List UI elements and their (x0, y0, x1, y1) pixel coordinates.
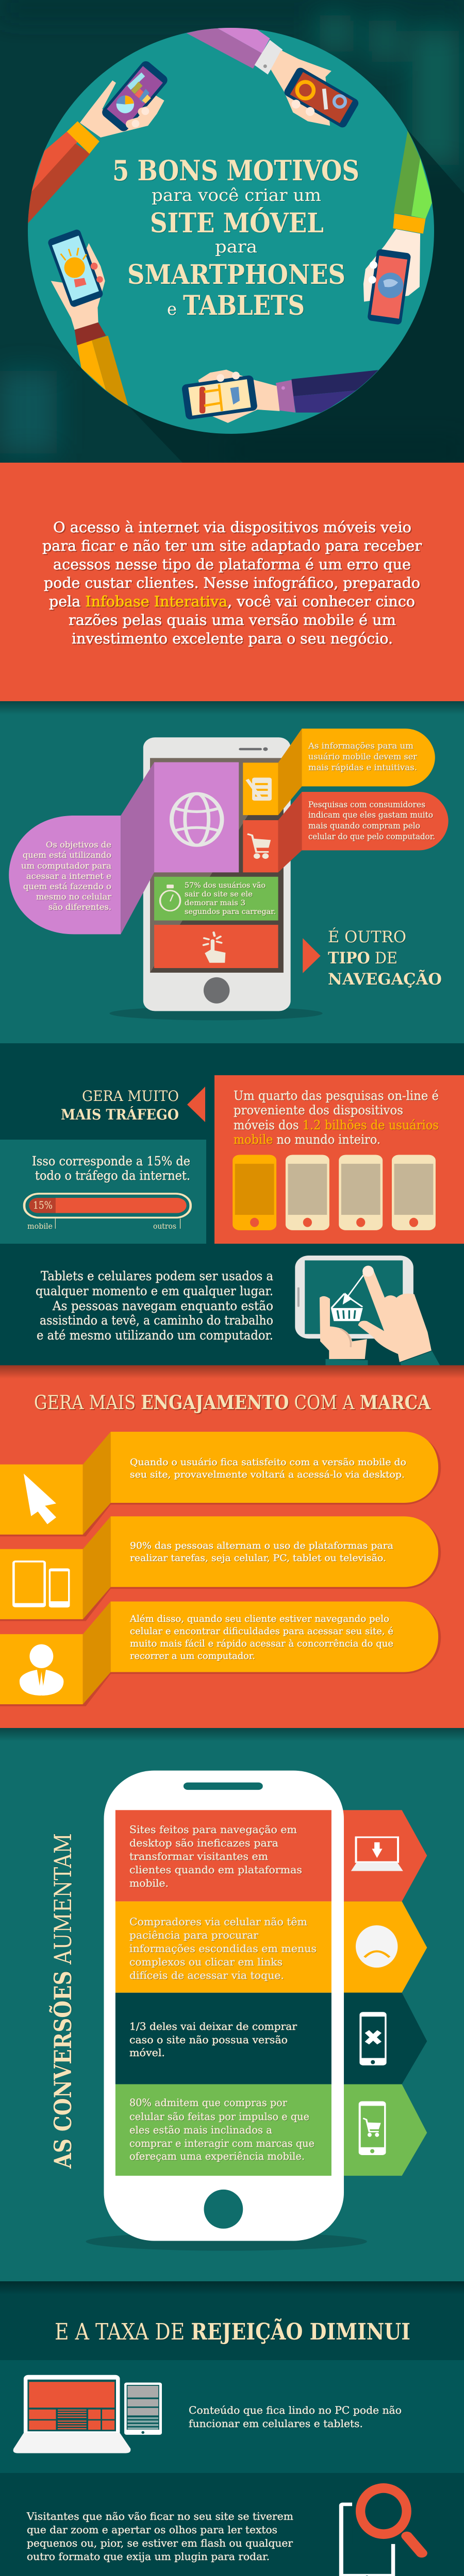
section: rejeição (0, 2281, 464, 2576)
bar texts: realizar tarefas, seja celular, PC, tablet ou televisão. (130, 1553, 386, 1564)
heading: GERA MAIS ENGAJAMENTO COM A MARCA (34, 1391, 431, 1414)
bar texts: seu site, provavelmente voltará a acessá-lo via desktop. (130, 1469, 405, 1480)
heading: E A TAXA DE REJEIÇÃO DIMINUI (55, 2318, 410, 2345)
panel: um quarto das pesquisas (214, 1075, 464, 1244)
intro text (42, 519, 422, 647)
icon: sad face (356, 1925, 397, 1968)
circle background (28, 28, 434, 434)
intro text: pela Infobase Interativa, você vai conhecer cinco (49, 593, 415, 610)
title: SMARTPHONES (127, 259, 345, 291)
intro text: investimento excelente para o seu negócio. (72, 630, 393, 647)
row texts: outro formato que exija um plugin para rodar. (27, 2550, 270, 2563)
panel: 15%: Isso corresponde a 15% de (32, 1154, 190, 1168)
icon: laptop and tablet (13, 2375, 162, 2453)
text: tablets e celulares (36, 1269, 273, 1343)
row texts (26, 2404, 429, 2576)
vertical heading: AS CONVERSÕES AUMENTAM (48, 1833, 77, 2169)
row texts: pequenos ou, pior, se estiver em flash ou qualquer (27, 2537, 293, 2549)
phone texts: caso o site não possua versão (129, 2033, 288, 2046)
intro text: razões pelas quais uma versão mobile é um (69, 612, 396, 629)
panel: um quarto das pesquisas: Um quarto das pesquisas on-line é (234, 1089, 439, 1103)
phone texts: Sites feitos para navegação em (129, 1823, 297, 1836)
arrows (340, 1810, 427, 1902)
bar texts: Quando o usuário fica satisfeito com a versão mobile do (130, 1457, 406, 1468)
phone texts: desktop são ineficazes para (129, 1837, 278, 1849)
heading: é outro tipo de navegação: É OUTRO (328, 927, 406, 946)
bar 3 (0, 1601, 441, 1706)
callout: orange (243, 728, 435, 815)
heading: é outro tipo de navegação: TIPO DE (328, 949, 397, 968)
heading: é outro tipo de navegação: NAVEGAÇÃO (328, 969, 442, 989)
callout texts: sair do site se ele (185, 890, 253, 899)
section: intro (0, 464, 464, 701)
callout texts: quem está fazendo o (23, 882, 111, 891)
text: tablets e celulares: As pessoas navegam enquanto estão (52, 1299, 273, 1313)
panel: 15%: todo o tráfego da internet. (35, 1168, 190, 1183)
bar texts: celular e encontrar dificuldades para acessar seu site, é (130, 1626, 393, 1637)
callout texts: As informações para um (308, 741, 413, 751)
arrow (303, 938, 321, 973)
phone texts (129, 1823, 317, 2162)
bar texts: 90% das pessoas alternam o uso de plataformas para (130, 1540, 393, 1551)
callout: red (243, 792, 449, 872)
callout texts: indicam que eles gastam muito (308, 810, 433, 820)
phone texts: comprar e interagir com marcas que (129, 2137, 314, 2149)
title: para (215, 236, 257, 257)
heading: gera muito mais tráfego: GERA MUITO (82, 1088, 179, 1105)
text: tablets e celulares: qualquer momento e em qualquer lugar. (36, 1284, 273, 1298)
phone texts: informações escondidas em menus (129, 1942, 317, 1955)
intro text: pode custar clientes. Nesse infográfico, preparado (44, 574, 420, 591)
phone texts: celular são feitas por impulso e que (129, 2110, 309, 2123)
phone texts: móvel. (129, 2046, 165, 2059)
phone texts: transformar visitantes em (129, 1850, 268, 1862)
phone texts: paciência para procurar (129, 1929, 258, 1941)
panel: um quarto das pesquisas: mobile no mundo inteiro. (234, 1132, 380, 1147)
hand 5: bulb phone (47, 228, 106, 345)
heading: gera muito mais tráfego: MAIS TRÁFEGO (61, 1106, 179, 1123)
phone texts: eles estão mais inclinados a (129, 2124, 272, 2136)
section: hero (0, 0, 464, 464)
title: para você criar um (152, 185, 321, 205)
callout: purple (9, 762, 239, 934)
tile: green stopwatch (154, 877, 278, 921)
intro text: O acesso à internet via dispositivos móveis veio (53, 519, 411, 536)
bar 1 (0, 1432, 441, 1536)
phone texts: complexos ou clicar em links (129, 1956, 283, 1968)
text: tablets e celulares: assistindo a tevê, a caminho do trabalho (40, 1313, 273, 1328)
row texts: que dar zoom e apertar os olhos para ler textos (27, 2523, 277, 2536)
icons: four phones (233, 1155, 436, 1230)
phone with callouts (9, 728, 449, 1020)
panel: um quarto das pesquisas: proveniente dos dispositivos (234, 1103, 403, 1117)
bar 2 (0, 1516, 441, 1621)
hand 2: gears phone (255, 40, 360, 129)
big phone (86, 1771, 427, 2251)
illustration: hands holding phones (27, 27, 433, 423)
long shadow (129, 129, 464, 464)
title: 5 BONS MOTIVOS (112, 154, 359, 187)
callout texts: acessar a internet e (26, 871, 111, 881)
callout texts: mesmo no celular (36, 892, 111, 902)
row texts: funcionar em celulares e tablets. (189, 2417, 363, 2430)
icon: phone with X (359, 2012, 387, 2065)
text: tablets e celulares: e até mesmo utilizando um computador. (37, 1328, 273, 1343)
heading: é outro tipo de navegação (328, 927, 442, 989)
icon: hands on tablet (295, 1256, 440, 1365)
callout texts: mais quando compram pelo (308, 821, 420, 831)
phone texts: Compradores via celular não têm (129, 1916, 307, 1928)
tile: red touch (154, 925, 278, 968)
icon: laptop download (351, 1837, 403, 1871)
panel: um quarto das pesquisas: móveis dos 1.2 bilhões de usuários (234, 1118, 439, 1132)
row texts: Visitantes que não vão ficar no seu site se tiverem (26, 2510, 293, 2522)
icon: phone with cart (359, 2102, 386, 2155)
title: e (167, 299, 177, 319)
icon: tablet and magnifier (339, 2483, 422, 2576)
phone texts: 80% admitem que compras por (129, 2096, 287, 2109)
bar texts: muito mais fácil e rápido acessar à concorrência do que (130, 1638, 393, 1649)
hand 4: shop phone (181, 370, 295, 423)
callout texts: demorar mais 3 (185, 899, 245, 907)
callout texts: quem está utilizando (23, 850, 111, 860)
section: conversões (0, 1728, 464, 2281)
intro text: acessos nesse tipo de plataforma é um erro que (53, 556, 411, 573)
callout texts: celular do que pelo computador. (308, 832, 435, 841)
bar texts: recorrer a um computador. (130, 1651, 255, 1662)
bar texts (129, 1457, 406, 1662)
section: engajamento (0, 1365, 464, 1728)
intro text: para ficar e não ter um site adaptado para receber (42, 537, 422, 554)
panel: 15% (0, 1140, 206, 1244)
row texts: Conteúdo que fica lindo no PC pode não (189, 2404, 402, 2416)
bar texts: Além disso, quando seu cliente estiver navegando pelo (129, 1614, 389, 1624)
panel: 15%: mobile (27, 1222, 53, 1231)
phone texts: difíceis de acessar via toque. (129, 1969, 284, 1981)
phone texts: 1/3 deles vai deixar de comprar (129, 2020, 297, 2032)
heading: gera muito mais tráfego (61, 1088, 179, 1123)
title: TABLETS (183, 290, 305, 321)
panel: 15%: outros (153, 1222, 176, 1231)
callout texts (21, 741, 435, 916)
callout texts: Pesquisas com consumidores (308, 800, 425, 809)
callout texts: segundos para carregar. (185, 908, 276, 916)
bars with icons (0, 1432, 441, 1706)
section: navegação (0, 701, 464, 1043)
callout texts: 57% dos usuários vão (185, 882, 266, 890)
callout texts: usuário mobile devem ser (308, 752, 417, 761)
callout texts: Os objetivos de (46, 840, 111, 850)
title: SITE MÓVEL (150, 207, 324, 239)
section: tráfego (0, 1043, 464, 1365)
hand 1: purple chart phone (67, 59, 170, 154)
text: tablets e celulares: Tablets e celulares podem ser usados a (41, 1269, 273, 1283)
title (112, 154, 359, 321)
phone texts: ofereçam uma experiência mobile. (129, 2150, 305, 2162)
phone texts: mobile. (129, 1877, 169, 1889)
callout texts: são diferentes. (48, 902, 111, 912)
hand 3: globe phone (363, 213, 425, 325)
callout texts: um computador para (21, 861, 111, 871)
panel: 15%: 15% (33, 1199, 53, 1211)
arrow (187, 1087, 205, 1122)
phone texts: clientes quando em plataformas (129, 1863, 302, 1876)
callout texts: mais rápidas e intuitivas. (308, 762, 417, 772)
progress bar (24, 1194, 191, 1229)
